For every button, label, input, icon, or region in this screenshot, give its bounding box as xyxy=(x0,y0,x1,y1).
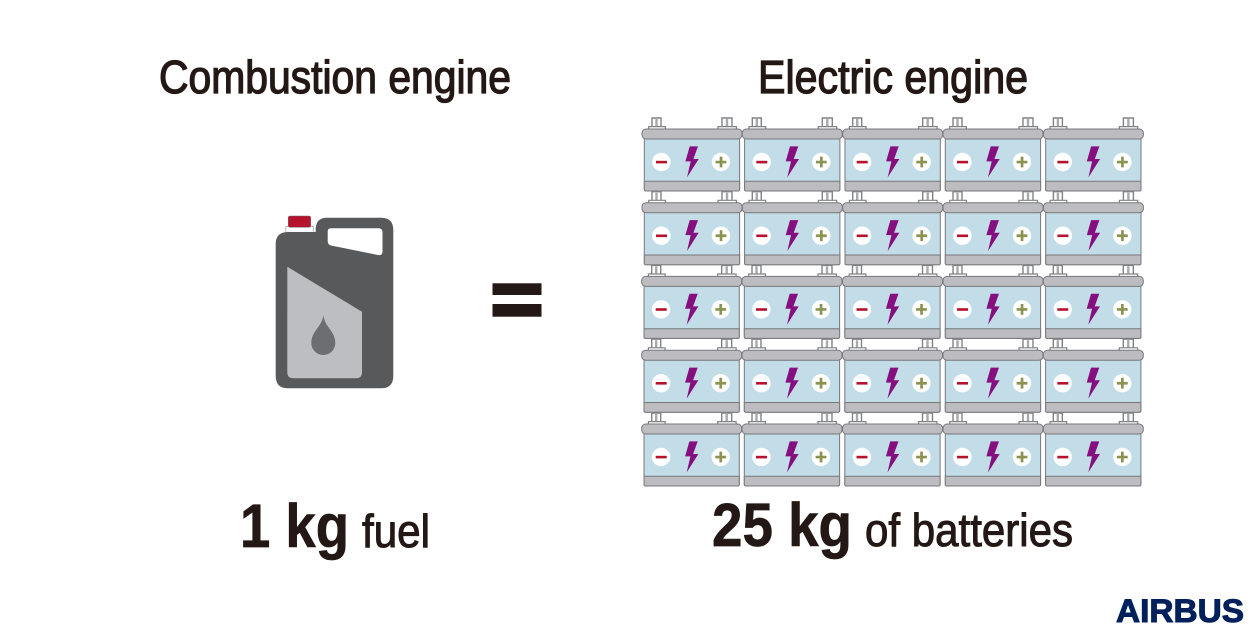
battery row 4 xyxy=(642,339,1143,412)
battery row 5 xyxy=(642,413,1143,486)
battery row 1 xyxy=(642,118,1143,191)
caption: 1 kg fuel: fuel xyxy=(362,505,430,557)
battery grid: 25 batteries xyxy=(642,118,1143,486)
caption: 1 kg fuel xyxy=(240,492,430,560)
title: combustion engine: Combustion engine xyxy=(159,51,511,103)
jerry can cap xyxy=(286,216,313,233)
icon: oil drop xyxy=(311,315,335,355)
caption: 25 kg of batteries: of batteries xyxy=(865,504,1073,556)
jerry can label xyxy=(287,267,362,378)
battery row 3 xyxy=(642,265,1143,338)
caption: 25 kg of batteries xyxy=(712,491,1073,559)
title: electric engine: Electric engine xyxy=(758,51,1028,103)
caption: 1 kg fuel: 1 kg xyxy=(240,492,349,560)
battery row 2 xyxy=(642,192,1143,265)
caption: 25 kg of batteries: 25 kg xyxy=(712,491,852,559)
logo: Airbus: AIRBUS xyxy=(1116,593,1244,629)
equals sign xyxy=(492,283,542,317)
jerry can body xyxy=(276,218,393,388)
icon: fuel jerry can xyxy=(276,216,393,388)
